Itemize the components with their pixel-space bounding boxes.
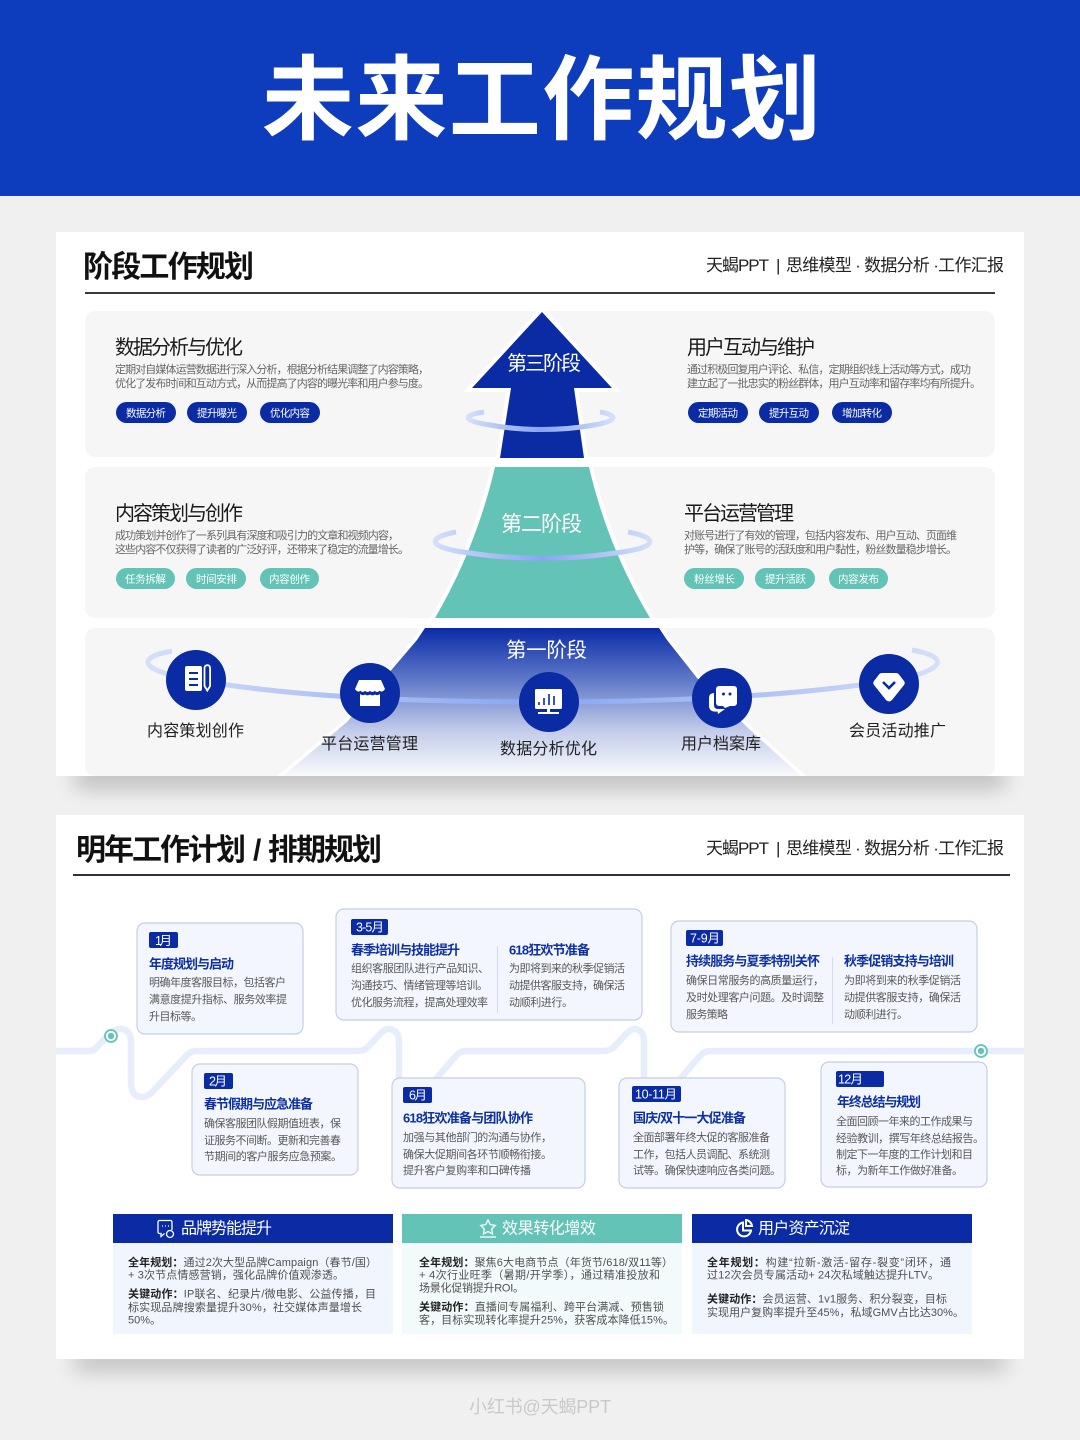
block: platform operations: 平台运营管理: [684, 502, 794, 525]
node: user archive: [681, 668, 761, 753]
panel: brand momentum: 50%。: [128, 1314, 161, 1326]
node: user archive: 用户档案库: [681, 735, 761, 753]
card: July to September: 7-9月: [690, 932, 720, 946]
card: July to September: 动顺利进行。: [844, 1008, 908, 1021]
block: platform operations: 提升活跃: [765, 574, 806, 586]
card: March to May: 沟通技巧、情绪管理等培训。: [351, 978, 488, 992]
block: content planning: 这些内容不仅获得了读者的广泛好评，还带来了稳定的流量增长。: [115, 542, 409, 556]
block: content planning: 内容策划与创作: [115, 502, 243, 525]
card: December: 年终总结与规划: [837, 1094, 921, 1110]
card: January: 满意度提升指标、服务效率提: [149, 992, 287, 1006]
panel: brand momentum: + 3次节点情感营销，强化品牌价值观渗透。: [128, 1268, 344, 1282]
card: February: [192, 1064, 358, 1175]
panel: brand momentum: 标实现品牌搜索量提升30%，社交媒体声量增长: [128, 1300, 362, 1314]
card: October to November: 10-11月: [635, 1088, 677, 1102]
panel: conversion efficiency: 全年规划：聚焦6大电商节点（年货节/618/双11等）: [419, 1255, 673, 1269]
card: June: 6月: [409, 1088, 427, 1102]
card: March to May: 为即将到来的秋季促销活: [509, 961, 625, 975]
card: March to May: 3-5月: [356, 920, 384, 934]
card: June: 提升客户复购率和口碑传播: [403, 1163, 531, 1177]
card: July to September: 服务策略: [686, 1007, 728, 1021]
start dot: [105, 1030, 117, 1042]
block: platform operations: 护等，确保了账号的活跃度和用户黏性，粉丝数量稳步增长。: [684, 542, 957, 556]
card: January: [137, 923, 303, 1034]
block: data analysis: 优化了发布时间和互动方式，从而提高了内容的曝光率和用户参与度。: [115, 376, 429, 390]
block: platform operations: [684, 502, 957, 589]
card: July to September: 持续服务与夏季特别关怀: [686, 954, 820, 968]
stage one base: [283, 628, 801, 776]
header banner: [0, 0, 1080, 196]
card: December: 经验教训，撰写年终总结报告。: [836, 1131, 984, 1145]
block: user interaction: 用户互动与维护: [687, 336, 815, 359]
card: July to September: 为即将到来的秋季促销活: [844, 973, 961, 987]
block: user interaction: [687, 336, 981, 423]
card: March to May: 组织客服团队进行产品知识、: [351, 961, 489, 975]
block: content planning: 成功策划并创作了一系列具有深度和吸引力的文章和视频内容，: [115, 528, 399, 542]
header note: 思维模型 · 数据分析 ·工作汇报: [786, 256, 1004, 275]
row background: stage one: [85, 628, 995, 776]
card: December: 标，为新年工作做好准备。: [836, 1163, 963, 1177]
card: December: 12月: [838, 1072, 863, 1086]
node: data analysis: [500, 672, 597, 758]
card: June: [392, 1078, 585, 1188]
block: data analysis: [115, 336, 429, 423]
card: March to May: 春季培训与技能提升: [351, 942, 460, 958]
node: data analysis: 数据分析优化: [500, 740, 597, 758]
header note: |: [776, 839, 780, 858]
card: June: 加强与其他部门的沟通与协作，: [403, 1130, 552, 1144]
heading: stage plan: 阶段工作规划: [83, 251, 254, 284]
block: user interaction: 增加转化: [842, 406, 882, 420]
panel: brand momentum: 关键动作：IP联名、纪录片/微电影、公益传播，目: [128, 1286, 376, 1300]
card: December: 全面回顾一年来的工作成果与: [836, 1114, 973, 1128]
panel: stage work plan: [56, 232, 1024, 776]
stage three arrow: [472, 312, 612, 458]
block: platform operations: 粉丝增长: [694, 572, 736, 586]
panel: brand momentum: 品牌势能提升: [181, 1220, 272, 1238]
block: content planning: 内容创作: [269, 572, 310, 586]
heading: next year plan: /: [253, 834, 262, 867]
panel: brand momentum: [113, 1214, 393, 1334]
block: user interaction: 通过积极回复用户评论、私信，定期组织线上活动等方式，成功: [687, 362, 971, 376]
card: June: 618狂欢准备与团队协作: [403, 1110, 533, 1126]
panel: brand momentum: 全年规划：通过2次大型品牌Campaign（春节/国）: [128, 1255, 377, 1269]
chart: stage pyramid: [283, 312, 801, 776]
card: January: 升目标等。: [149, 1009, 202, 1023]
orbit ring: stage two: [435, 532, 650, 558]
card: March to May: [336, 909, 642, 1020]
heading: next year plan: 排期规划: [268, 834, 380, 867]
header note: |: [776, 256, 780, 275]
panel: conversion efficiency: 关键动作：直播间专属福利、跨平台满减、预售锁: [419, 1300, 664, 1314]
stage three arrow: 第三阶段: [507, 352, 581, 375]
card: December: 制定下一年度的工作计划和目: [836, 1147, 973, 1161]
card: February: 春节假期与应急准备: [204, 1096, 313, 1112]
card: December: [821, 1062, 987, 1187]
block: data analysis: 数据分析与优化: [115, 336, 243, 359]
card: October to November: [619, 1078, 785, 1188]
panel: next year plan: [56, 815, 1024, 1359]
block: platform operations: 内容发布: [838, 572, 879, 586]
card: February: 节期间的客户服务应急预案。: [204, 1149, 342, 1163]
block: platform operations: 对账号进行了有效的管理，包括内容发布、用户互动、页面维: [684, 528, 957, 542]
block: data analysis: 提升曝光: [197, 406, 238, 420]
card: February: 确保客服团队假期值班表，保: [204, 1116, 341, 1130]
stage one base: 第一阶段: [506, 639, 587, 662]
panel: user assets: [692, 1214, 972, 1334]
icon: document and pencil: [185, 665, 210, 691]
block: content planning: 时间安排: [196, 572, 238, 586]
panel: conversion efficiency: [402, 1214, 682, 1334]
orbit ring: stage three: [468, 412, 613, 430]
panel: user assets: 用户资产沉淀: [758, 1220, 850, 1238]
panel: conversion efficiency: 客，目标实现转化率提升25%，获客成本降低15%。: [419, 1312, 674, 1326]
block: user interaction: 建立起了一批忠实的粉丝群体，用户互动率和留存率均有所提升。: [687, 376, 981, 390]
title: 未来工作规划: [262, 50, 821, 152]
card: October to November: 工作，包括人员调配、系统测: [633, 1147, 770, 1161]
block: user interaction: 提升互动: [769, 408, 809, 420]
card: January: 明确年度客服目标，包括客户: [149, 975, 286, 989]
row background: stage three: [85, 311, 995, 457]
stage two trapezoid: 第二阶段: [501, 513, 582, 536]
panel: user assets: 关键动作：会员运营、1v1服务、积分裂变，目标: [707, 1292, 947, 1306]
icon: star on base: [480, 1220, 496, 1237]
panel: conversion efficiency: 场景化促销提升ROI。: [419, 1280, 524, 1294]
block: data analysis: 优化内容: [270, 406, 310, 420]
orbit ring: stage one: [148, 650, 937, 702]
timeline path: [56, 1029, 1024, 1097]
header note: 思维模型 · 数据分析 ·工作汇报: [786, 839, 1004, 858]
panel: user assets: 实现用户复购率提升至45%，私域GMV占比达30%。: [707, 1305, 964, 1319]
icon: monitor chart: [535, 689, 562, 714]
card: June: 确保大促期间各环节顺畅衔接。: [403, 1147, 552, 1161]
header note: 天蝎PPT: [706, 256, 769, 275]
card: March to May: 动顺利进行。: [509, 996, 573, 1009]
heading: next year plan: 明年工作计划: [76, 834, 244, 867]
block: data analysis: 定期对自媒体运营数据进行深入分析，根据分析结果调整了内容策略，: [115, 362, 429, 376]
panel: user assets: 全年规划：构建“拉新-激活-留存-裂变”闭环，通: [707, 1255, 951, 1269]
card: March to May: 618狂欢节准备: [509, 942, 590, 958]
icon: diamond badge: [873, 673, 905, 702]
panel: user assets: 过12次会员专属活动+ 24次私域触达提升LTV。: [707, 1268, 939, 1282]
block: user interaction: 定期活动: [698, 406, 738, 420]
card shadows: [75, 764, 1005, 1371]
card: January: 年度规划与启动: [149, 956, 234, 972]
card: March to May: 动提供客服支持，确保活: [509, 978, 625, 992]
node: content planning: [147, 650, 244, 740]
node: content planning: 内容策划创作: [147, 722, 244, 740]
card: February: 2月: [209, 1074, 227, 1088]
end dot: [975, 1045, 987, 1057]
card: July to September: [671, 921, 977, 1032]
header note: 天蝎PPT: [706, 839, 769, 858]
card: October to November: 全面部署年终大促的客服准备: [633, 1130, 770, 1144]
card: October to November: 试等。确保快速响应各类问题。: [633, 1163, 781, 1177]
card: July to September: 动提供客服支持，确保活: [844, 990, 961, 1004]
icon: pie chart: [737, 1220, 752, 1236]
node: member activity: [849, 654, 946, 740]
card: July to September: 确保日常服务的高质量运行，: [686, 973, 824, 987]
card: October to November: 国庆/双十一大促准备: [633, 1110, 746, 1126]
panel: conversion efficiency: 效果转化增效: [502, 1220, 596, 1238]
card: March to May: 优化服务流程，提高处理效率: [351, 995, 488, 1009]
card: July to September: 及时处理客户问题。及时调整: [686, 990, 824, 1004]
node: platform management: 平台运营管理: [321, 735, 418, 753]
node: member activity: 会员活动推广: [849, 722, 946, 740]
row background: stage two: [85, 467, 995, 618]
block: data analysis: 数据分析: [126, 406, 166, 420]
icon: chat check: [158, 1220, 174, 1238]
watermark: 小红书@天蝎PPT: [469, 1397, 611, 1417]
block: content planning: [115, 502, 409, 589]
panel: conversion efficiency: + 4次行业旺季（暑期/开学季），通过精准投放和: [419, 1268, 660, 1282]
card: February: 证服务不间断。更新和完善春: [204, 1133, 341, 1147]
icon: chat bubbles: [709, 686, 737, 714]
node: platform management: [321, 663, 418, 753]
card: July to September: 秋季促销支持与培训: [844, 954, 954, 968]
card: January: 1月: [155, 934, 172, 948]
stage two trapezoid: [435, 467, 650, 618]
block: content planning: 任务拆解: [125, 572, 166, 586]
icon: storefront: [355, 680, 385, 706]
